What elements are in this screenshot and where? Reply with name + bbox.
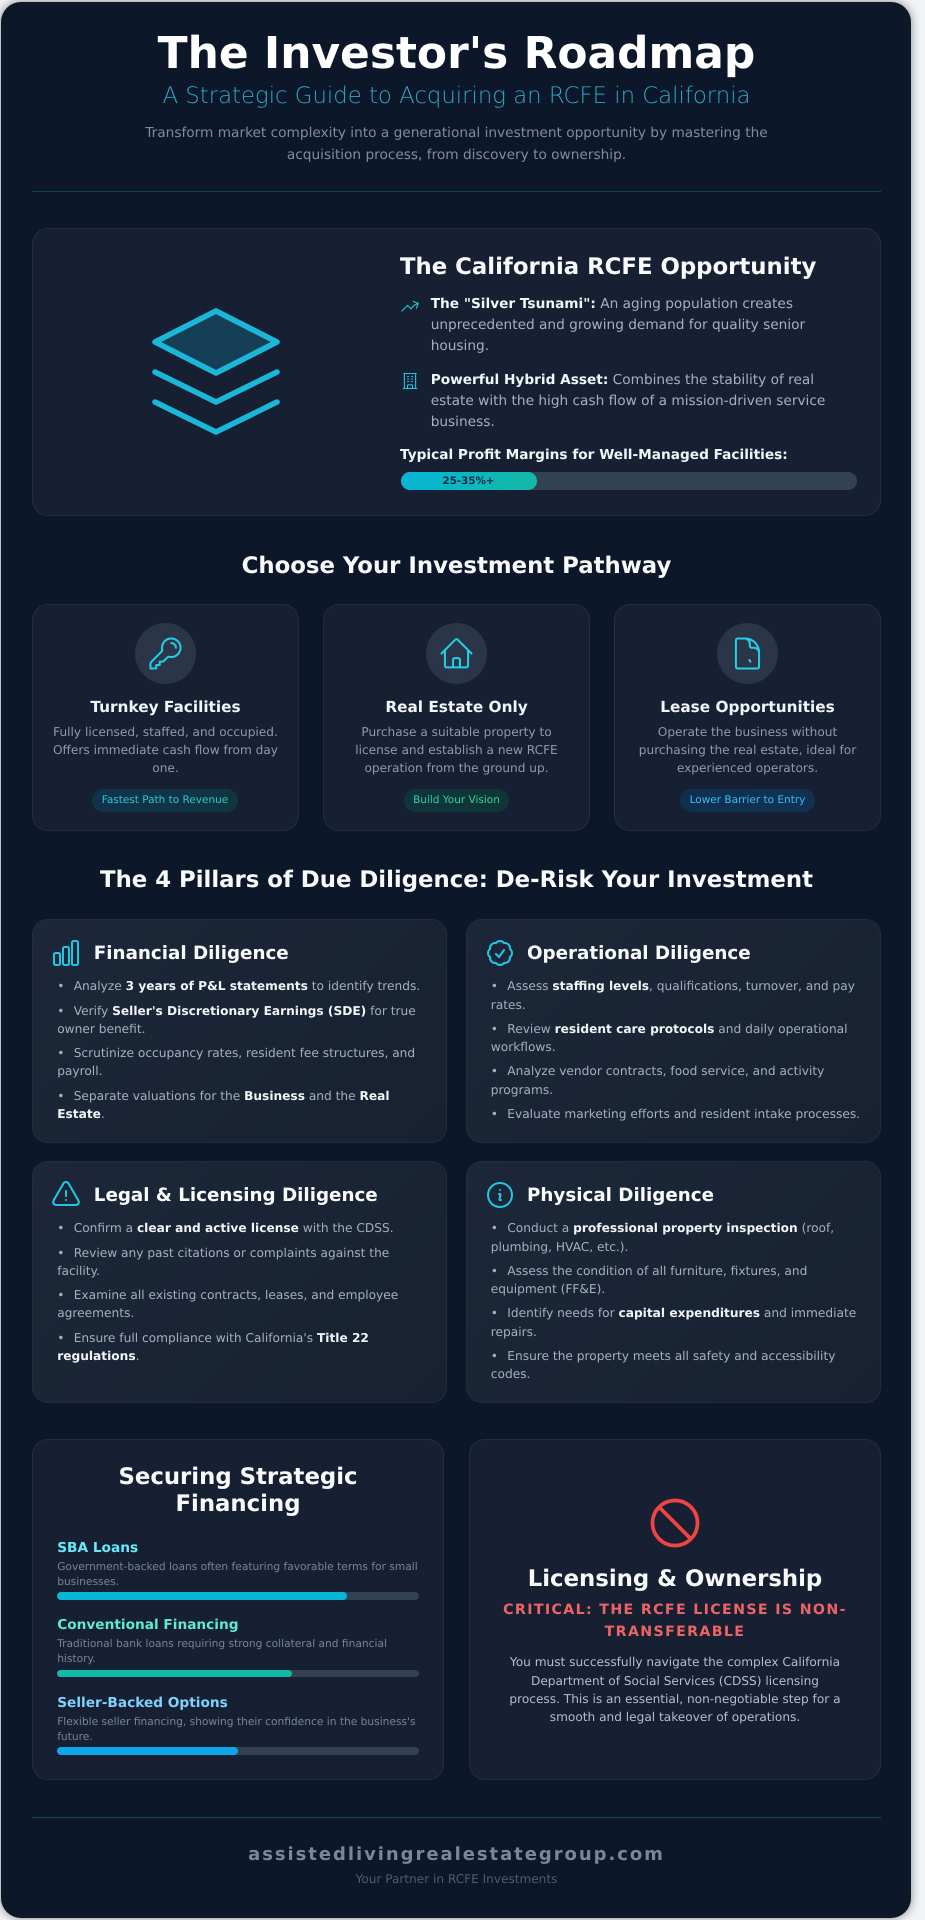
heading: due diligence: The 4 Pillars of Due Diligence: De-Risk Your Investment — [100, 867, 813, 893]
pillar list: • — [491, 1221, 498, 1235]
tag — [92, 789, 238, 812]
pillar list: owner benefit. — [57, 1022, 146, 1036]
icon: document — [717, 623, 778, 684]
financing heading: Financing — [175, 1491, 301, 1517]
card description: Fully licensed, staffed, and occupied. — [53, 725, 278, 739]
critical warning: TRANSFERABLE — [605, 1624, 745, 1640]
pillar title: Legal & Licensing Diligence — [94, 1185, 378, 1206]
pillar list: Scrutinize occupancy rates, resident fee structures, and — [74, 1046, 415, 1060]
icon: house — [426, 623, 487, 684]
title: The Investor's Roadmap — [158, 28, 755, 79]
pillar list: Examine all existing contracts, leases, and employee — [74, 1288, 398, 1302]
icon: trending up — [401, 300, 419, 312]
pillar list: Ensure full compliance with California's Title 22 — [74, 1331, 369, 1345]
pillar list: rates. — [491, 998, 526, 1012]
tag — [404, 789, 509, 812]
margin progress bar — [400, 472, 856, 490]
tag: Fastest Path to Revenue — [102, 794, 228, 806]
opportunity heading: The California RCFE Opportunity — [400, 254, 816, 280]
pillar list: • — [57, 1288, 64, 1302]
card: real estate only — [323, 604, 590, 831]
pillar list: • — [57, 1331, 64, 1345]
icon: layers — [152, 308, 280, 435]
pillar list: payroll. — [57, 1064, 102, 1078]
financing option: seller-backed: Flexible seller financing, showing their confidence in the business's — [57, 1715, 416, 1728]
pillar list: Identify needs for capital expenditures and immediate — [507, 1306, 856, 1320]
pillar list: Evaluate marketing efforts and resident intake processes. — [507, 1107, 860, 1121]
pillar list — [491, 979, 860, 1121]
margin bar label: Typical Profit Margins for Well-Managed Facilities: — [400, 447, 788, 463]
tag: Build Your Vision — [413, 794, 500, 806]
pillar list: Confirm a clear and active license with the CDSS. — [74, 1221, 394, 1235]
financing option: SBA loans: Government-backed loans often featuring favorable terms for small — [57, 1560, 418, 1573]
pillar list: Verify Seller's Discretionary Earnings (SDE) for true — [74, 1004, 416, 1018]
licensing text: Department of Social Services (CDSS) licensing — [531, 1674, 819, 1688]
icon: key — [135, 623, 196, 684]
card description: Operate the business without — [658, 725, 837, 739]
intro text — [145, 125, 768, 163]
pillar title: Operational Diligence — [527, 943, 751, 964]
card description — [639, 725, 856, 775]
pillar list: programs. — [491, 1083, 553, 1097]
panel: California RCFE opportunity — [32, 228, 881, 516]
hybrid asset text: estate with the high cash flow of a mission-driven service — [431, 393, 825, 409]
silver tsunami text: The "Silver Tsunami": An aging population creates — [431, 296, 793, 312]
pillar list: Separate valuations for the Business and the Real — [74, 1089, 390, 1103]
financing option: SBA loans: businesses. — [57, 1575, 119, 1588]
pillar list: • — [491, 1107, 498, 1121]
financing option: SBA loans: SBA Loans — [57, 1540, 138, 1556]
financing option: seller-backed: Seller-Backed Options — [57, 1694, 228, 1710]
panel: operational diligence — [466, 919, 881, 1143]
pillar list: regulations. — [57, 1349, 139, 1363]
pillar list — [57, 1221, 398, 1363]
financing option: conventional: Conventional Financing — [57, 1617, 239, 1633]
pillar list: • — [491, 979, 498, 993]
licensing text: You must successfully navigate the complex California — [510, 1655, 840, 1669]
card description: operation from the ground up. — [364, 761, 549, 775]
pillar list: • — [491, 1349, 498, 1363]
card description: one. — [152, 761, 179, 775]
pillar list — [491, 1221, 856, 1381]
pillar list: • — [57, 1046, 64, 1060]
financing option: conventional: history. — [57, 1652, 96, 1665]
financing option: seller-backed — [57, 1694, 419, 1755]
pillar list: • — [491, 1264, 498, 1278]
pillar list: facility. — [57, 1264, 100, 1278]
pillar list: • — [57, 979, 64, 993]
pillar list: • — [491, 1064, 498, 1078]
card description: experienced operators. — [677, 761, 818, 775]
panel: strategic financing — [32, 1439, 444, 1780]
panel: financial diligence — [32, 919, 447, 1143]
pillar list: Analyze 3 years of P&L statements to identify trends. — [74, 979, 420, 993]
pillar list — [57, 979, 420, 1121]
tag — [680, 789, 815, 812]
pillar list: • — [491, 1306, 498, 1320]
icon: badge check — [487, 940, 513, 966]
pillar list: Ensure the property meets all safety and accessibility — [507, 1349, 835, 1363]
pillar list: equipment (FF&E). — [491, 1282, 605, 1296]
financing option: seller-backed: future. — [57, 1730, 93, 1743]
pillar list: Conduct a professional property inspection (roof, — [507, 1221, 834, 1235]
pillar list: plumbing, HVAC, etc.). — [491, 1240, 628, 1254]
margin progress bar: 25-35%+ — [443, 475, 494, 487]
licensing text: process. This is an essential, non-negotiable step for a — [509, 1692, 841, 1706]
critical warning — [503, 1602, 847, 1640]
licensing text: smooth and legal takeover of operations. — [550, 1710, 800, 1724]
pillar list: codes. — [491, 1367, 530, 1381]
hybrid asset text: business. — [431, 414, 495, 430]
card title: Real Estate Only — [385, 698, 528, 716]
hybrid asset text — [431, 372, 825, 430]
hybrid asset text: Powerful Hybrid Asset: Combines the stability of real — [431, 372, 814, 388]
pillar title: Physical Diligence — [527, 1185, 714, 1206]
card description: license and establish a new RCFE — [355, 743, 558, 757]
card description: Purchase a suitable property to — [361, 725, 552, 739]
subtitle: A Strategic Guide to Acquiring an RCFE in California — [162, 83, 751, 109]
pillar title: Financial Diligence — [94, 943, 289, 964]
pillar list: repairs. — [491, 1325, 537, 1339]
pillar list: Assess staffing levels, qualifications, turnover, and pay — [507, 979, 855, 993]
financing option: SBA loans — [57, 1540, 419, 1600]
card title: Lease Opportunities — [660, 698, 835, 716]
silver tsunami text: housing. — [431, 338, 489, 354]
panel: physical diligence — [466, 1161, 881, 1403]
pillar list: • — [57, 1221, 64, 1235]
silver tsunami text: unprecedented and growing demand for quality senior — [431, 317, 805, 333]
pillar list: • — [57, 1089, 64, 1103]
pillar list: • — [57, 1246, 64, 1260]
pillar list: Review any past citations or complaints against the — [74, 1246, 389, 1260]
financing heading — [118, 1464, 358, 1517]
tag: Lower Barrier to Entry — [690, 794, 805, 806]
pillar list: Assess the condition of all furniture, fixtures, and — [507, 1264, 807, 1278]
card description — [53, 725, 278, 775]
footer tagline: Your Partner in RCFE Investments — [356, 1872, 557, 1886]
pillar list: agreements. — [57, 1306, 134, 1320]
icon: bar chart — [53, 940, 79, 966]
pillar list: • — [491, 1022, 498, 1036]
intro text: acquisition process, from discovery to ownership. — [287, 147, 626, 163]
panel: legal and licensing diligence — [32, 1161, 447, 1403]
card description — [355, 725, 558, 775]
intro text: Transform market complexity into a generational investment opportunity by mastering the — [145, 125, 768, 141]
panel: licensing and ownership — [469, 1439, 881, 1780]
financing option: conventional — [57, 1617, 419, 1677]
footer url: assistedlivingrealestategroup.com — [248, 1844, 665, 1864]
icon: prohibited — [650, 1498, 700, 1548]
pillar list: Review resident care protocols and daily operational — [507, 1022, 848, 1036]
pillar list: Analyze vendor contracts, food service, and activity — [507, 1064, 824, 1078]
heading: investment pathway: Choose Your Investment Pathway — [242, 553, 671, 579]
pillar list: • — [57, 1004, 64, 1018]
card title: Turnkey Facilities — [90, 698, 241, 716]
icon: building — [402, 373, 418, 389]
pillar list: Estate. — [57, 1107, 105, 1121]
icon: warning triangle — [52, 1181, 80, 1206]
card: lease opportunities — [614, 604, 881, 831]
financing heading: Securing Strategic — [118, 1464, 358, 1490]
licensing heading: Licensing & Ownership — [528, 1566, 822, 1592]
critical warning: CRITICAL: THE RCFE LICENSE IS NON- — [503, 1602, 847, 1618]
silver tsunami text — [430, 296, 806, 354]
card: turnkey facilities — [32, 604, 299, 831]
licensing text — [509, 1655, 841, 1724]
financing option: conventional: Traditional bank loans requiring strong collateral and financial — [57, 1637, 387, 1650]
icon: info — [487, 1182, 513, 1208]
card description: purchasing the real estate, ideal for — [639, 743, 856, 757]
card description: Offers immediate cash flow from day — [53, 743, 278, 757]
pillar list: workflows. — [491, 1040, 556, 1054]
